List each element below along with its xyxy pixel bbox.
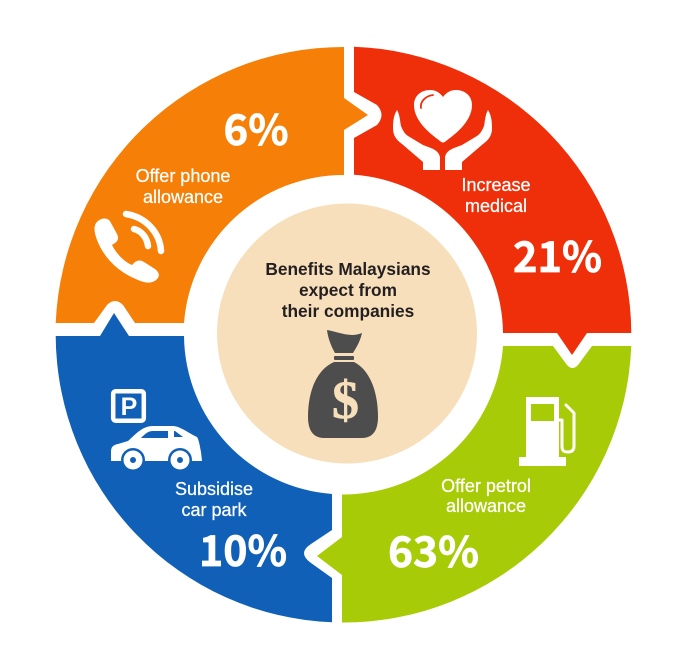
icon: money bag xyxy=(308,330,378,438)
beige circle xyxy=(217,204,477,464)
label: offer petrol allowance: Offer petrol xyxy=(441,476,531,496)
percentage: 10%: 10% xyxy=(199,518,287,579)
percentage: 63%: 63% xyxy=(388,519,479,580)
icon: car xyxy=(111,426,202,472)
label: increase medical: medical xyxy=(465,196,527,216)
panel: increase medical xyxy=(354,47,631,355)
panel: offer petrol allowance xyxy=(317,346,631,623)
label: offer phone allowance: Offer phone xyxy=(136,166,230,186)
heading: benefits malaysians expect from their companies: Benefits Malaysians xyxy=(265,259,431,279)
label: offer phone allowance: allowance xyxy=(143,187,223,207)
heading: benefits malaysians expect from their companies: expect from xyxy=(299,280,397,300)
label: subsidise car park: Subsidise xyxy=(175,479,253,499)
panel: subsidise car park xyxy=(56,313,332,622)
label: subsidise car park: car park xyxy=(181,500,248,520)
red segment xyxy=(354,47,631,355)
label: increase medical: Increase xyxy=(461,175,531,195)
panel: offer phone allowance xyxy=(56,47,368,323)
icon: heart in hands xyxy=(393,90,492,170)
percentage: 6%: 6% xyxy=(224,97,288,158)
blue segment xyxy=(56,313,332,622)
icon: money bag: $ xyxy=(332,370,359,430)
heading: benefits malaysians expect from their companies: their companies xyxy=(282,301,414,321)
icon: parking sign: P xyxy=(121,393,137,421)
icon: parking sign xyxy=(113,391,144,421)
label: offer petrol allowance: allowance xyxy=(446,496,526,516)
icon: petrol pump xyxy=(519,397,574,466)
percentage: 21%: 21% xyxy=(513,224,602,285)
orange segment xyxy=(56,47,368,323)
panel: centre circle xyxy=(217,204,477,464)
icon: telephone xyxy=(94,214,161,283)
green segment xyxy=(317,346,631,623)
